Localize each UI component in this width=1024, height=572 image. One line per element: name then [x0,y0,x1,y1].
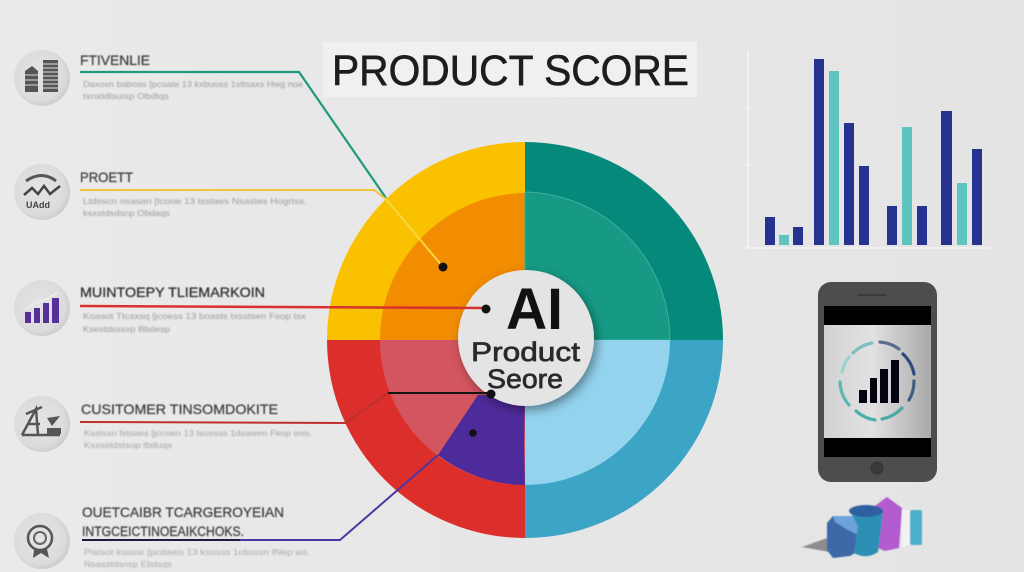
phone bars [859,360,899,403]
center circle: AI [506,277,563,342]
phone ring [840,342,914,420]
item: customer satisfaction [14,504,310,569]
item: customer satisfaction: OUETCAIBR TCARGEROYEIAN [82,504,284,520]
item: revenue: FTIVENLIE [80,52,150,68]
item: monthly: Koasot Ttcsxsq [jcoess 13 boasts txsstsen Fsop tsx [83,311,307,321]
connector: profit [80,190,386,199]
item: revenue: txnxtdlsuixp Obdtqs [83,91,169,101]
item: customer [14,396,312,452]
phone [818,282,937,482]
item: customer: Ksxsstdstsop tbduqs [84,440,172,450]
item: monthly [14,280,307,336]
connector: customer [80,393,388,423]
donut chart [327,142,723,538]
connector: profit inner [386,199,443,267]
connector: customer black [388,392,492,394]
connector dots [438,262,496,437]
3d bars [802,497,922,558]
center circle [458,270,594,406]
item: customer: CUSITOMER TINSOMDOKITE [81,401,278,417]
item: customer: Ksstsxn fstsaes [jccoen 13 tsossss 1dsawen Fkop wss. [84,428,312,438]
item: profit: ksxstdsdsnp Obdaqs [83,208,170,218]
item: customer satisfaction: Nsasstdsnsp Ebdsqs [84,559,172,569]
connector: revenue [80,72,386,198]
item: profit: Ltdsscn osasan [tcooe 13 tsstaes Nsastes Hogrtss. [83,196,307,206]
item: profit [14,164,307,220]
item: profit: PROETT [80,169,133,185]
item: customer satisfaction: INTGCEICTINOEAIKCHOKS. [82,523,244,539]
item: revenue: Daxoxn baboas [pcoate 13 kxbuoss 1sttsaxs Hwg noe [83,79,303,89]
icon: customer satisfaction [14,513,70,569]
center circle: Product [471,337,581,367]
title: PRODUCT SCORE [332,47,689,95]
item: revenue [14,50,303,106]
connector: dark start [82,539,240,541]
icon: profit [14,164,70,220]
connector: monthly [80,306,486,308]
connector: customer satisfaction [82,455,438,540]
bar chart [745,50,990,248]
purple wedge [438,395,525,485]
icon: monthly [14,280,70,336]
icon: revenue [14,50,70,106]
item: customer satisfaction: Pistsot ksassr [pcdaeis 13 ksosss 1cbsssn fNep ws. [84,547,310,557]
icon: profit: UAdd [26,200,50,210]
item: monthly: MUINTOEPY TLIEMARKOIN [80,284,265,300]
center circle: Seore [487,364,563,394]
item: monthly: Ksestdsssxp Bbdesp [83,324,170,334]
icon: customer [14,396,70,452]
